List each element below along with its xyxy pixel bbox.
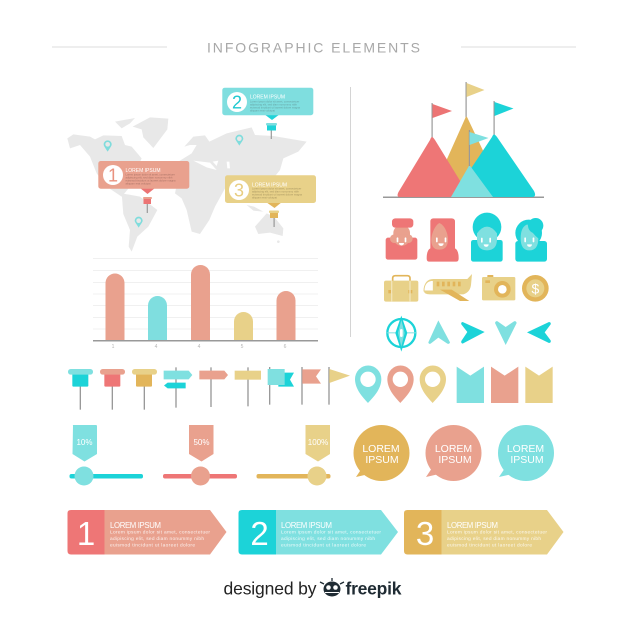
callout 3: LOREM IPSUM — [252, 182, 287, 188]
banner 3 — [404, 510, 564, 554]
slider 10%: 10% — [76, 438, 93, 447]
speech bubble teal: IPSUM — [510, 454, 544, 466]
callout 3: 3 — [234, 180, 244, 200]
slider 50% — [163, 425, 237, 486]
banner 3: adipiscing elit, sed diam nonummy nibh — [447, 536, 541, 542]
icon: airplane — [424, 274, 472, 301]
person 4 — [515, 218, 547, 262]
icon: dollar coin: $ — [531, 280, 539, 296]
callout 3 — [225, 175, 316, 227]
speech bubble teal — [498, 425, 554, 481]
signpost single — [199, 367, 228, 407]
callout 3: aliquam erat volutpat — [252, 196, 277, 200]
banner 1: 1 — [77, 515, 95, 552]
person 1 — [386, 218, 417, 260]
callout 2: euismod tincidunt ut laoreet dolore magna — [250, 106, 301, 110]
marker teal — [355, 365, 381, 403]
callout 1: aliquam erat volutpat — [126, 182, 151, 186]
pin red — [100, 369, 125, 410]
callout 1: LOREM IPSUM — [126, 168, 161, 174]
icon: dollar coin — [522, 275, 549, 302]
banner 2 — [238, 510, 398, 554]
speech bubble yellow: IPSUM — [365, 454, 399, 466]
pin teal — [68, 369, 93, 410]
callout 1: adipiscing elit, sed diam nonummy nibh — [126, 176, 173, 180]
speech bubble salmon: LOREM — [435, 443, 472, 455]
pins and signposts row — [68, 367, 350, 410]
footer credit — [224, 578, 402, 598]
speech bubble salmon: IPSUM — [438, 454, 472, 466]
icon: compass — [387, 316, 416, 352]
icon: arrow down — [495, 321, 517, 345]
bar chart: 4 — [155, 344, 158, 350]
banner 1: adipiscing elit, sed diam nonummy nibh — [110, 536, 204, 542]
pin yellow — [132, 369, 157, 410]
bar chart: 4 — [198, 344, 201, 350]
callout 2: LOREM IPSUM — [250, 94, 285, 100]
marker yellow — [420, 365, 446, 403]
flag double — [268, 367, 294, 405]
icon: arrow right — [461, 322, 485, 344]
location markers and ribbons — [355, 365, 553, 403]
footer credit: designed by — [224, 578, 317, 598]
banner 1: Lorem ipsum dolor sit amet, consectetuer — [110, 530, 210, 536]
pin — [266, 123, 277, 139]
marker salmon — [387, 365, 414, 403]
banner 3: LOREM IPSUM — [447, 521, 498, 530]
slider 10% — [70, 425, 143, 486]
icon: suitcase — [384, 276, 418, 302]
callout 2: aliquam erat volutpat — [250, 108, 275, 112]
banner 1: euismod tincidunt ut laoreet dolore — [110, 542, 195, 548]
speech bubble yellow: LOREM — [362, 443, 400, 455]
callout 2: 2 — [232, 92, 242, 112]
world map — [67, 117, 307, 252]
callout 3: euismod tincidunt ut laoreet dolore magna — [252, 192, 303, 196]
banner 3: Lorem ipsum dolor sit amet, consectetuer — [447, 530, 547, 536]
bar chart: 6 — [284, 344, 287, 350]
map markers — [104, 135, 243, 228]
bar chart: 1 — [112, 344, 115, 350]
icon: freepik bee — [320, 578, 344, 596]
bar chart — [93, 258, 318, 350]
speech bubble teal: LOREM — [507, 443, 544, 455]
icon: camera — [482, 275, 515, 300]
signpost double — [164, 367, 192, 408]
icon: arrow left — [527, 322, 551, 343]
ribbon teal — [457, 367, 484, 403]
pin — [143, 197, 152, 213]
banner 3: euismod tincidunt ut laoreet dolore — [447, 542, 532, 548]
banner 2: 2 — [250, 515, 269, 552]
callout 3: Lorem ipsum dolor sit amet, consectetuer — [252, 186, 301, 190]
callout 1: Lorem ipsum dolor sit amet, consectetuer — [126, 172, 175, 176]
pin — [269, 210, 279, 227]
banner 1 — [68, 510, 226, 554]
title: INFOGRAPHIC ELEMENTS — [207, 40, 420, 56]
slider 50%: 50% — [193, 438, 210, 447]
navigation icons — [387, 316, 551, 352]
callout 3: adipiscing elit, sed diam nonummy nibh — [252, 190, 299, 194]
callout 1: 1 — [108, 166, 118, 186]
banner 2: euismod tincidunt ut laoreet dolore — [281, 542, 366, 548]
speech bubble salmon — [426, 425, 482, 481]
callout 2 — [222, 88, 313, 139]
callout 1 — [98, 161, 189, 213]
people icons — [386, 213, 547, 262]
callout 2: Lorem ipsum dolor sit amet, consectetuer — [250, 100, 299, 104]
callout 1: euismod tincidunt ut laoreet dolore magna — [126, 178, 176, 182]
bar chart: 5 — [241, 344, 244, 350]
banner 2: adipiscing elit, sed diam nonummy nibh — [281, 536, 375, 542]
icon: arrow up — [428, 320, 450, 344]
ribbon yellow — [525, 367, 553, 403]
footer credit: freepik — [346, 578, 402, 598]
flag triangle — [328, 367, 350, 405]
ribbon salmon — [491, 367, 518, 403]
person 2 — [427, 218, 459, 262]
map inland seas — [193, 161, 230, 170]
travel icons — [384, 274, 549, 302]
slider 100%: 100% — [308, 438, 328, 447]
banner 1: LOREM IPSUM — [110, 521, 161, 530]
banner 2: LOREM IPSUM — [281, 521, 332, 530]
person 3 — [471, 213, 503, 262]
flag pennant notch — [301, 367, 321, 405]
speech bubble yellow — [354, 425, 410, 481]
mountains with flags — [383, 82, 544, 198]
callout 2: adipiscing elit, sed diam nonummy nibh — [250, 102, 297, 106]
signpost plain — [235, 367, 261, 406]
banner 3: 3 — [416, 515, 434, 552]
slider 100% — [256, 425, 330, 486]
flag poles — [432, 82, 495, 139]
banner 2: Lorem ipsum dolor sit amet, consectetuer — [281, 530, 381, 536]
